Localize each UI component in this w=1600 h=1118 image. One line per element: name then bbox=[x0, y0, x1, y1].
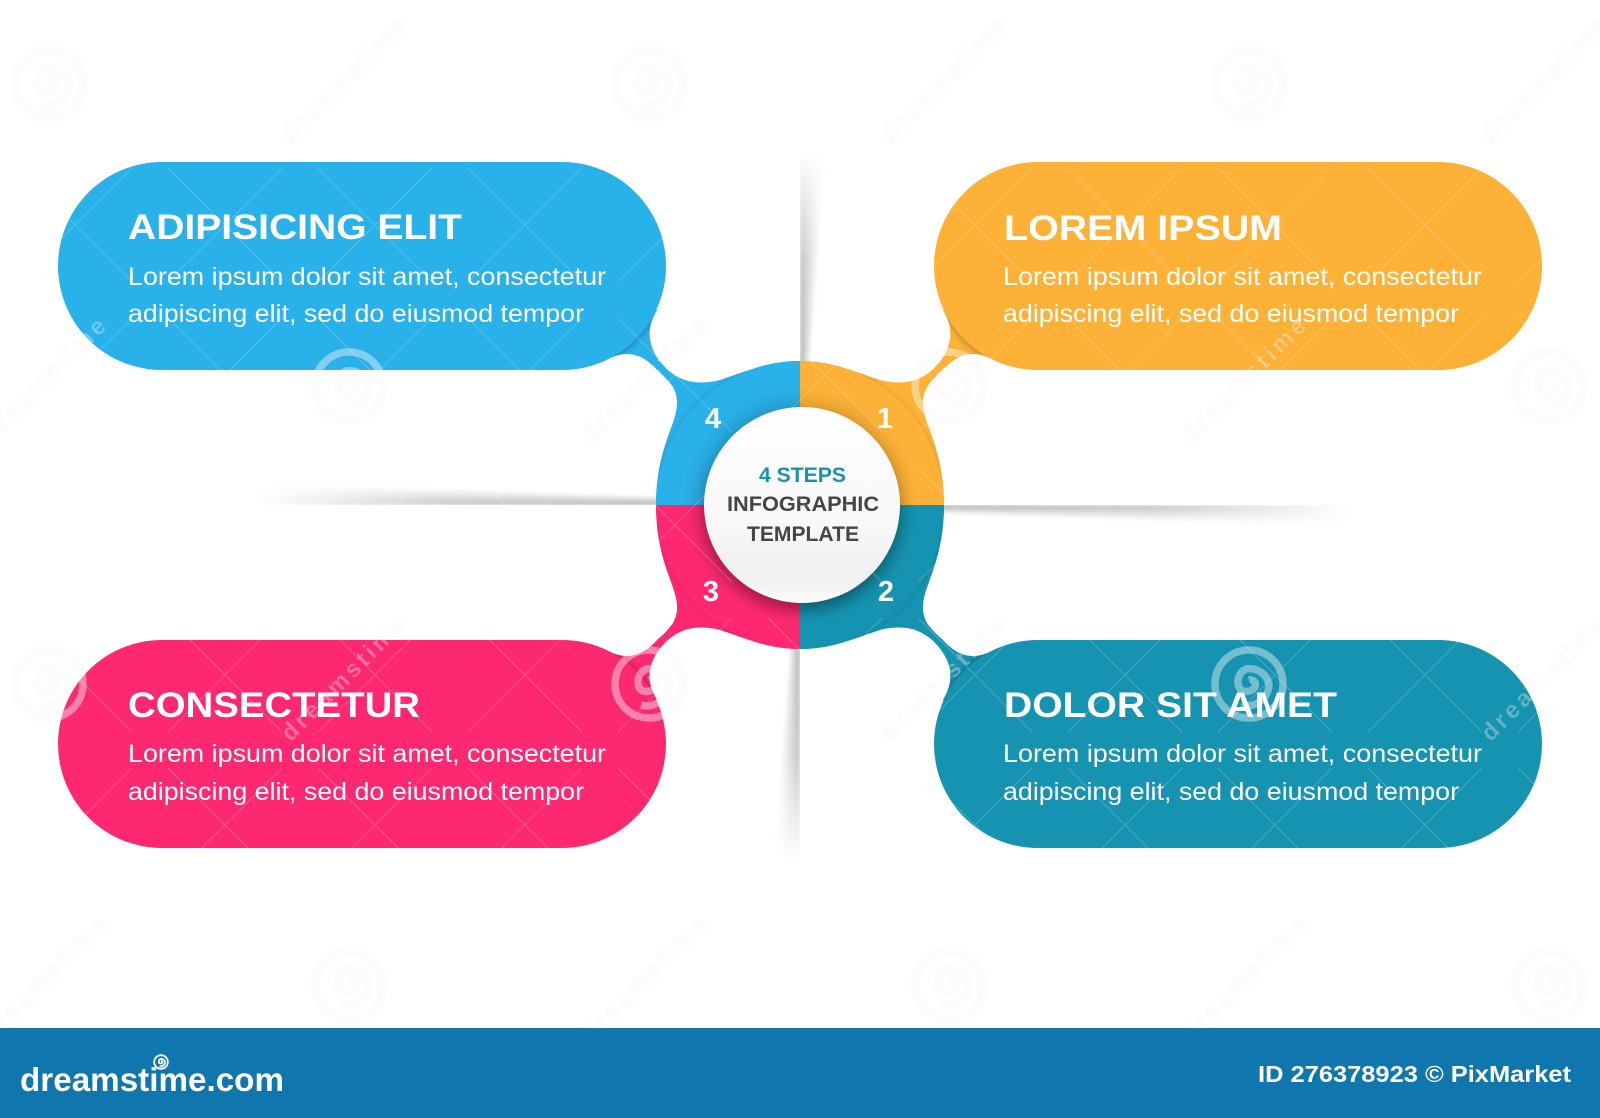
step numbers: 1 bbox=[877, 403, 893, 435]
watermark text: dreamstime bbox=[576, 912, 712, 1048]
panel: step 3 consectetur bbox=[58, 505, 800, 848]
text block: consectetur: Lorem ipsum dolor sit amet, consectetur bbox=[128, 740, 606, 768]
text block: adipisicing elit: Lorem ipsum dolor sit amet, consectetur bbox=[128, 263, 606, 291]
text block: consectetur: CONSECTETUR bbox=[128, 686, 420, 725]
text block: lorem ipsum: adipiscing elit, sed do eiusmod tempor bbox=[1003, 300, 1459, 328]
watermark text: dreamstime bbox=[1176, 912, 1312, 1048]
ring shading around centre bbox=[656, 361, 944, 649]
centre title: TEMPLATE bbox=[747, 523, 859, 546]
watermark text: dreamstime bbox=[876, 611, 1012, 747]
text block: adipisicing elit: ADIPISICING ELIT bbox=[128, 208, 462, 247]
panel: step 2 dolor sit amet bbox=[800, 505, 1542, 848]
text block: lorem ipsum: LOREM IPSUM bbox=[1004, 209, 1282, 248]
watermark text: dreamstime bbox=[276, 611, 412, 747]
text block: adipisicing elit bbox=[128, 208, 606, 328]
watermark text: dreamstime bbox=[876, 12, 1012, 148]
footer credit: ID 276378923 © PixMarket bbox=[1258, 1061, 1571, 1087]
step numbers: 2 bbox=[878, 576, 894, 608]
centre title: 4 STEPS bbox=[759, 464, 846, 487]
step numbers: 3 bbox=[703, 576, 719, 608]
fold shadows bbox=[258, 152, 1350, 860]
step numbers: 4 bbox=[705, 403, 721, 435]
panel: step 1 lorem ipsum bbox=[800, 162, 1542, 505]
text block: dolor sit amet: Lorem ipsum dolor sit amet, consectetur bbox=[1003, 740, 1482, 768]
footer banner bbox=[0, 1028, 1600, 1118]
centre disc bbox=[704, 407, 900, 603]
centre title: INFOGRAPHIC bbox=[727, 493, 879, 516]
text block: dolor sit amet bbox=[1003, 686, 1482, 806]
text block: lorem ipsum bbox=[1003, 209, 1482, 328]
panel: step 4 adipisicing elit bbox=[58, 162, 800, 505]
text block: dolor sit amet: DOLOR SIT AMET bbox=[1004, 686, 1337, 725]
text block: consectetur bbox=[128, 686, 606, 806]
watermark text: dreamstime bbox=[576, 313, 712, 449]
watermark text: dreamstime bbox=[1176, 313, 1312, 449]
text block: consectetur: adipiscing elit, sed do eiusmod tempor bbox=[128, 778, 584, 806]
text block: lorem ipsum: Lorem ipsum dolor sit amet, consectetur bbox=[1003, 263, 1482, 291]
text block: adipisicing elit: adipiscing elit, sed do eiusmod tempor bbox=[128, 300, 584, 328]
watermark text: dreamstime bbox=[276, 12, 412, 148]
text block: dolor sit amet: adipiscing elit, sed do eiusmod tempor bbox=[1003, 778, 1459, 806]
step numbers bbox=[703, 403, 894, 608]
footer logo: dreamstime.com bbox=[20, 1061, 284, 1098]
centre disc shadow bbox=[704, 414, 900, 610]
centre title bbox=[727, 464, 879, 546]
